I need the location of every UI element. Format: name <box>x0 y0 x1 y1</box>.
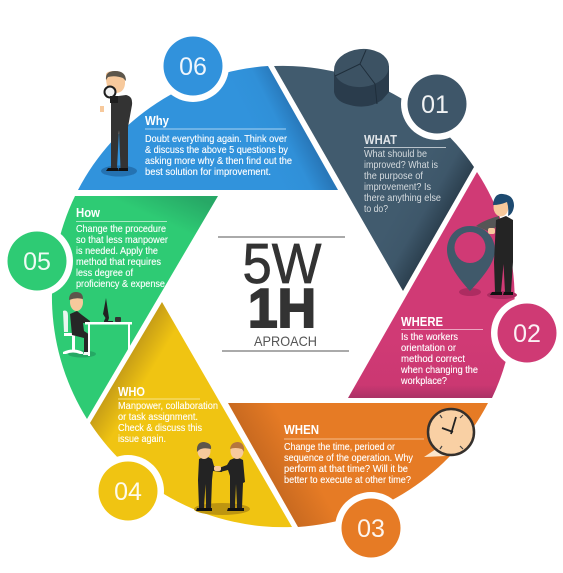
badge ring 02 <box>491 297 563 369</box>
body text WHAT: there anything else <box>364 192 441 204</box>
icon: pie cylinder <box>332 46 391 107</box>
subtitle APROACH: APROACH <box>254 333 317 349</box>
body text WHO: Check & discuss this <box>118 422 202 434</box>
badge 06: 06 <box>179 53 207 81</box>
body text WHAT: What should be <box>364 148 427 160</box>
body text WHERE: orientation or <box>401 342 456 354</box>
badge 01: 01 <box>421 91 449 119</box>
body text WHERE: method correct <box>401 353 465 365</box>
icon: businessman leaning on pin <box>476 194 517 299</box>
body text How: proficiency & expense <box>76 278 165 290</box>
heading WHO: WHO <box>118 384 145 399</box>
body text How: less degree of <box>76 267 133 279</box>
body text How: so that less manpower <box>76 234 168 246</box>
body text How <box>76 223 168 290</box>
body text WHO: or task assignment. <box>118 411 198 423</box>
badge ring 01 <box>401 68 473 140</box>
badge ring 04 <box>92 455 164 527</box>
body text How: Change the procedure <box>76 223 166 235</box>
badge 02: 02 <box>513 320 541 348</box>
panel: Who <box>90 302 292 527</box>
icon: clock <box>424 409 474 457</box>
body text WHO: issue again. <box>118 433 166 445</box>
body text WHERE: workplace? <box>400 375 447 387</box>
body text Why: Doubt everything again. Think over <box>145 133 287 145</box>
pink segment <box>348 172 515 398</box>
badge 05 <box>8 232 66 290</box>
body text Why: & discuss the above 5 questions by <box>145 144 289 156</box>
body text WHERE: when changing the <box>400 364 478 376</box>
panel: Why <box>78 30 338 190</box>
badge ring 06 <box>157 30 229 102</box>
body text WHERE: Is the workers <box>401 331 458 343</box>
body text WHEN <box>284 441 414 486</box>
body text WHERE <box>400 331 478 387</box>
heading WHERE: WHERE <box>401 314 443 329</box>
body text WHO <box>118 400 218 445</box>
badge 06 <box>164 36 222 96</box>
title 1H: 1H <box>248 277 316 339</box>
badge 03 <box>342 498 400 558</box>
body text How: is needed. Apply the <box>76 245 158 257</box>
icon: man with magnifier <box>96 71 137 176</box>
green segment <box>52 196 218 419</box>
badge 05: 05 <box>23 248 51 276</box>
body text WHAT: the purpose of <box>364 170 423 182</box>
badge ring 03 <box>335 492 407 564</box>
body text WHEN: Change the time, perioed or <box>284 441 395 453</box>
centre title: 5W 1H Aproach <box>218 232 349 352</box>
badge ring 05 <box>1 225 73 297</box>
body text Why: asking more why & then find out the <box>145 155 292 167</box>
icon: map pin <box>447 226 495 296</box>
icon: man at desk <box>63 292 132 358</box>
body text WHEN: perform at that time? Will it be <box>284 463 408 475</box>
body text WHAT: improved? What is <box>364 159 438 171</box>
badge 01 <box>408 74 466 134</box>
title 5W: 5W <box>242 232 322 296</box>
body text WHEN: sequence of the operation. Why <box>284 452 414 464</box>
body text WHO: Manpower, collaboration <box>118 400 218 412</box>
badge 04: 04 <box>114 478 142 506</box>
panel: Where <box>348 172 563 398</box>
orange segment <box>228 403 488 527</box>
body text Why <box>145 133 292 178</box>
badge 03: 03 <box>357 515 385 543</box>
yellow segment <box>90 302 292 527</box>
slate segment <box>274 66 474 291</box>
panel: What <box>274 46 474 291</box>
badge 02 <box>498 304 556 362</box>
badge 04 <box>98 462 158 520</box>
body text WHEN: better to execute at other time? <box>284 474 411 486</box>
panel: When <box>228 403 488 564</box>
heading Why: Why <box>145 113 170 128</box>
body text How: method that requires <box>76 256 161 268</box>
blue segment <box>78 66 338 190</box>
body text Why: best solution for improvement. <box>145 166 271 178</box>
body text WHAT: to do? <box>364 203 388 215</box>
heading How: How <box>76 205 101 220</box>
body text WHAT <box>364 148 441 215</box>
body text WHAT: improvement? Is <box>364 181 431 193</box>
panel: How <box>1 196 218 419</box>
heading WHEN: WHEN <box>284 422 319 437</box>
heading WHAT: WHAT <box>364 132 397 147</box>
icon: two men shaking hands <box>194 442 250 515</box>
